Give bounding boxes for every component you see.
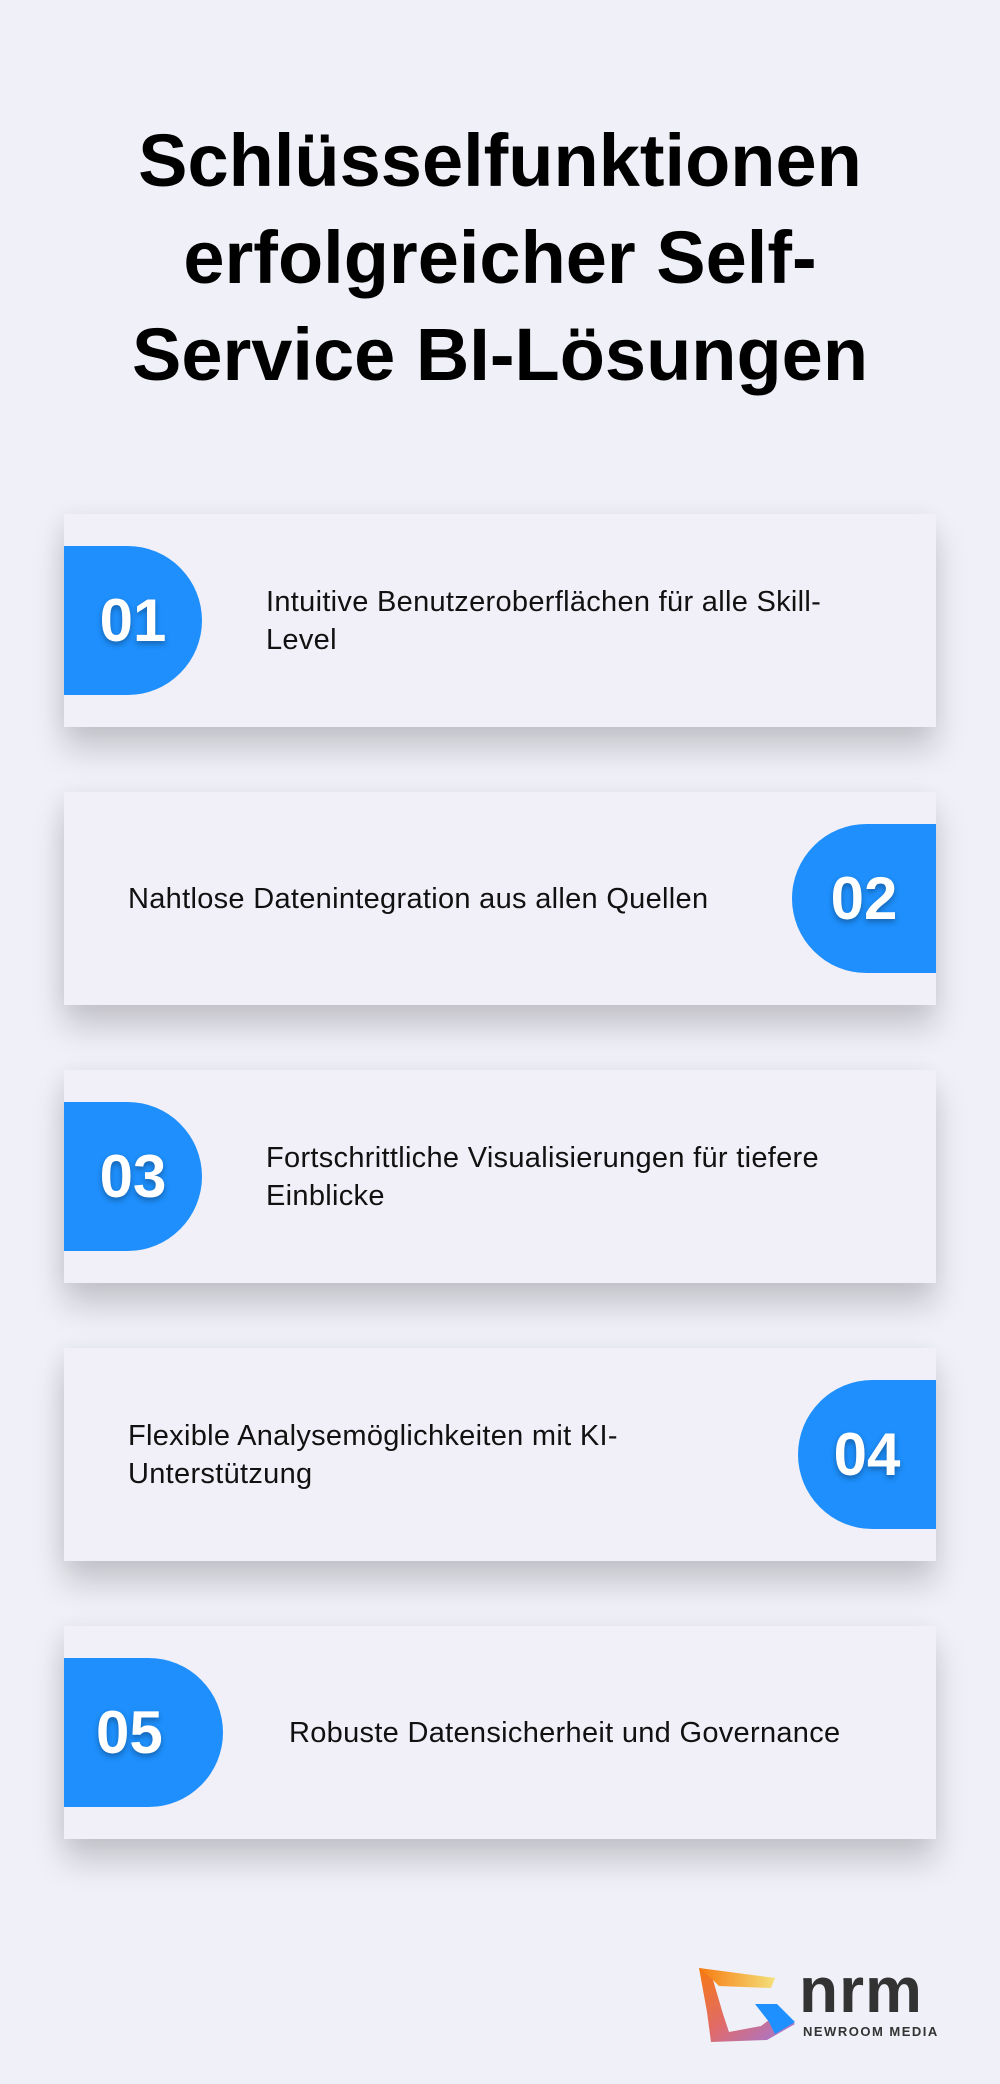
text 3: Einblicke (266, 1180, 385, 1212)
badge 04: 04 (834, 1421, 900, 1488)
badge 03: 03 (100, 1143, 166, 1210)
text 1: Intuitive Benutzeroberflächen für alle Skill- (266, 586, 821, 618)
title: Service BI-Lösungen (132, 313, 868, 396)
text 1 (266, 586, 821, 656)
card 1 (64, 514, 936, 727)
logo text: nrm (799, 1954, 923, 2026)
badge 03 (64, 1102, 202, 1251)
card 3 (64, 1070, 936, 1283)
badge 01: 01 (100, 587, 166, 654)
icon: logo mark (699, 1968, 795, 2042)
card 4 (64, 1348, 936, 1561)
badge 02: 02 (831, 865, 897, 932)
logo: NEWROOM MEDIA (803, 2024, 939, 2039)
text 1: Level (266, 624, 337, 656)
badge 01 (64, 546, 202, 695)
text 4 (128, 1420, 618, 1490)
text 5: Robuste Datensicherheit und Governance (289, 1716, 840, 1748)
badge 02 (792, 824, 936, 973)
text 4: Flexible Analysemöglichkeiten mit KI- (128, 1420, 618, 1452)
card 2 (64, 792, 936, 1005)
logo (699, 1954, 939, 2042)
title: Schlüsselfunktionen (138, 119, 862, 202)
title (132, 119, 868, 396)
text 3 (266, 1142, 819, 1212)
title: erfolgreicher Self- (183, 216, 817, 299)
badge 05 (64, 1658, 223, 1807)
text 2: Nahtlose Datenintegration aus allen Quellen (128, 882, 708, 914)
card 5 (64, 1626, 936, 1839)
badge 04 (798, 1380, 936, 1529)
text 4: Unterstützung (128, 1458, 312, 1490)
badge 05: 05 (96, 1699, 163, 1766)
text 3: Fortschrittliche Visualisierungen für tiefere (266, 1142, 819, 1174)
